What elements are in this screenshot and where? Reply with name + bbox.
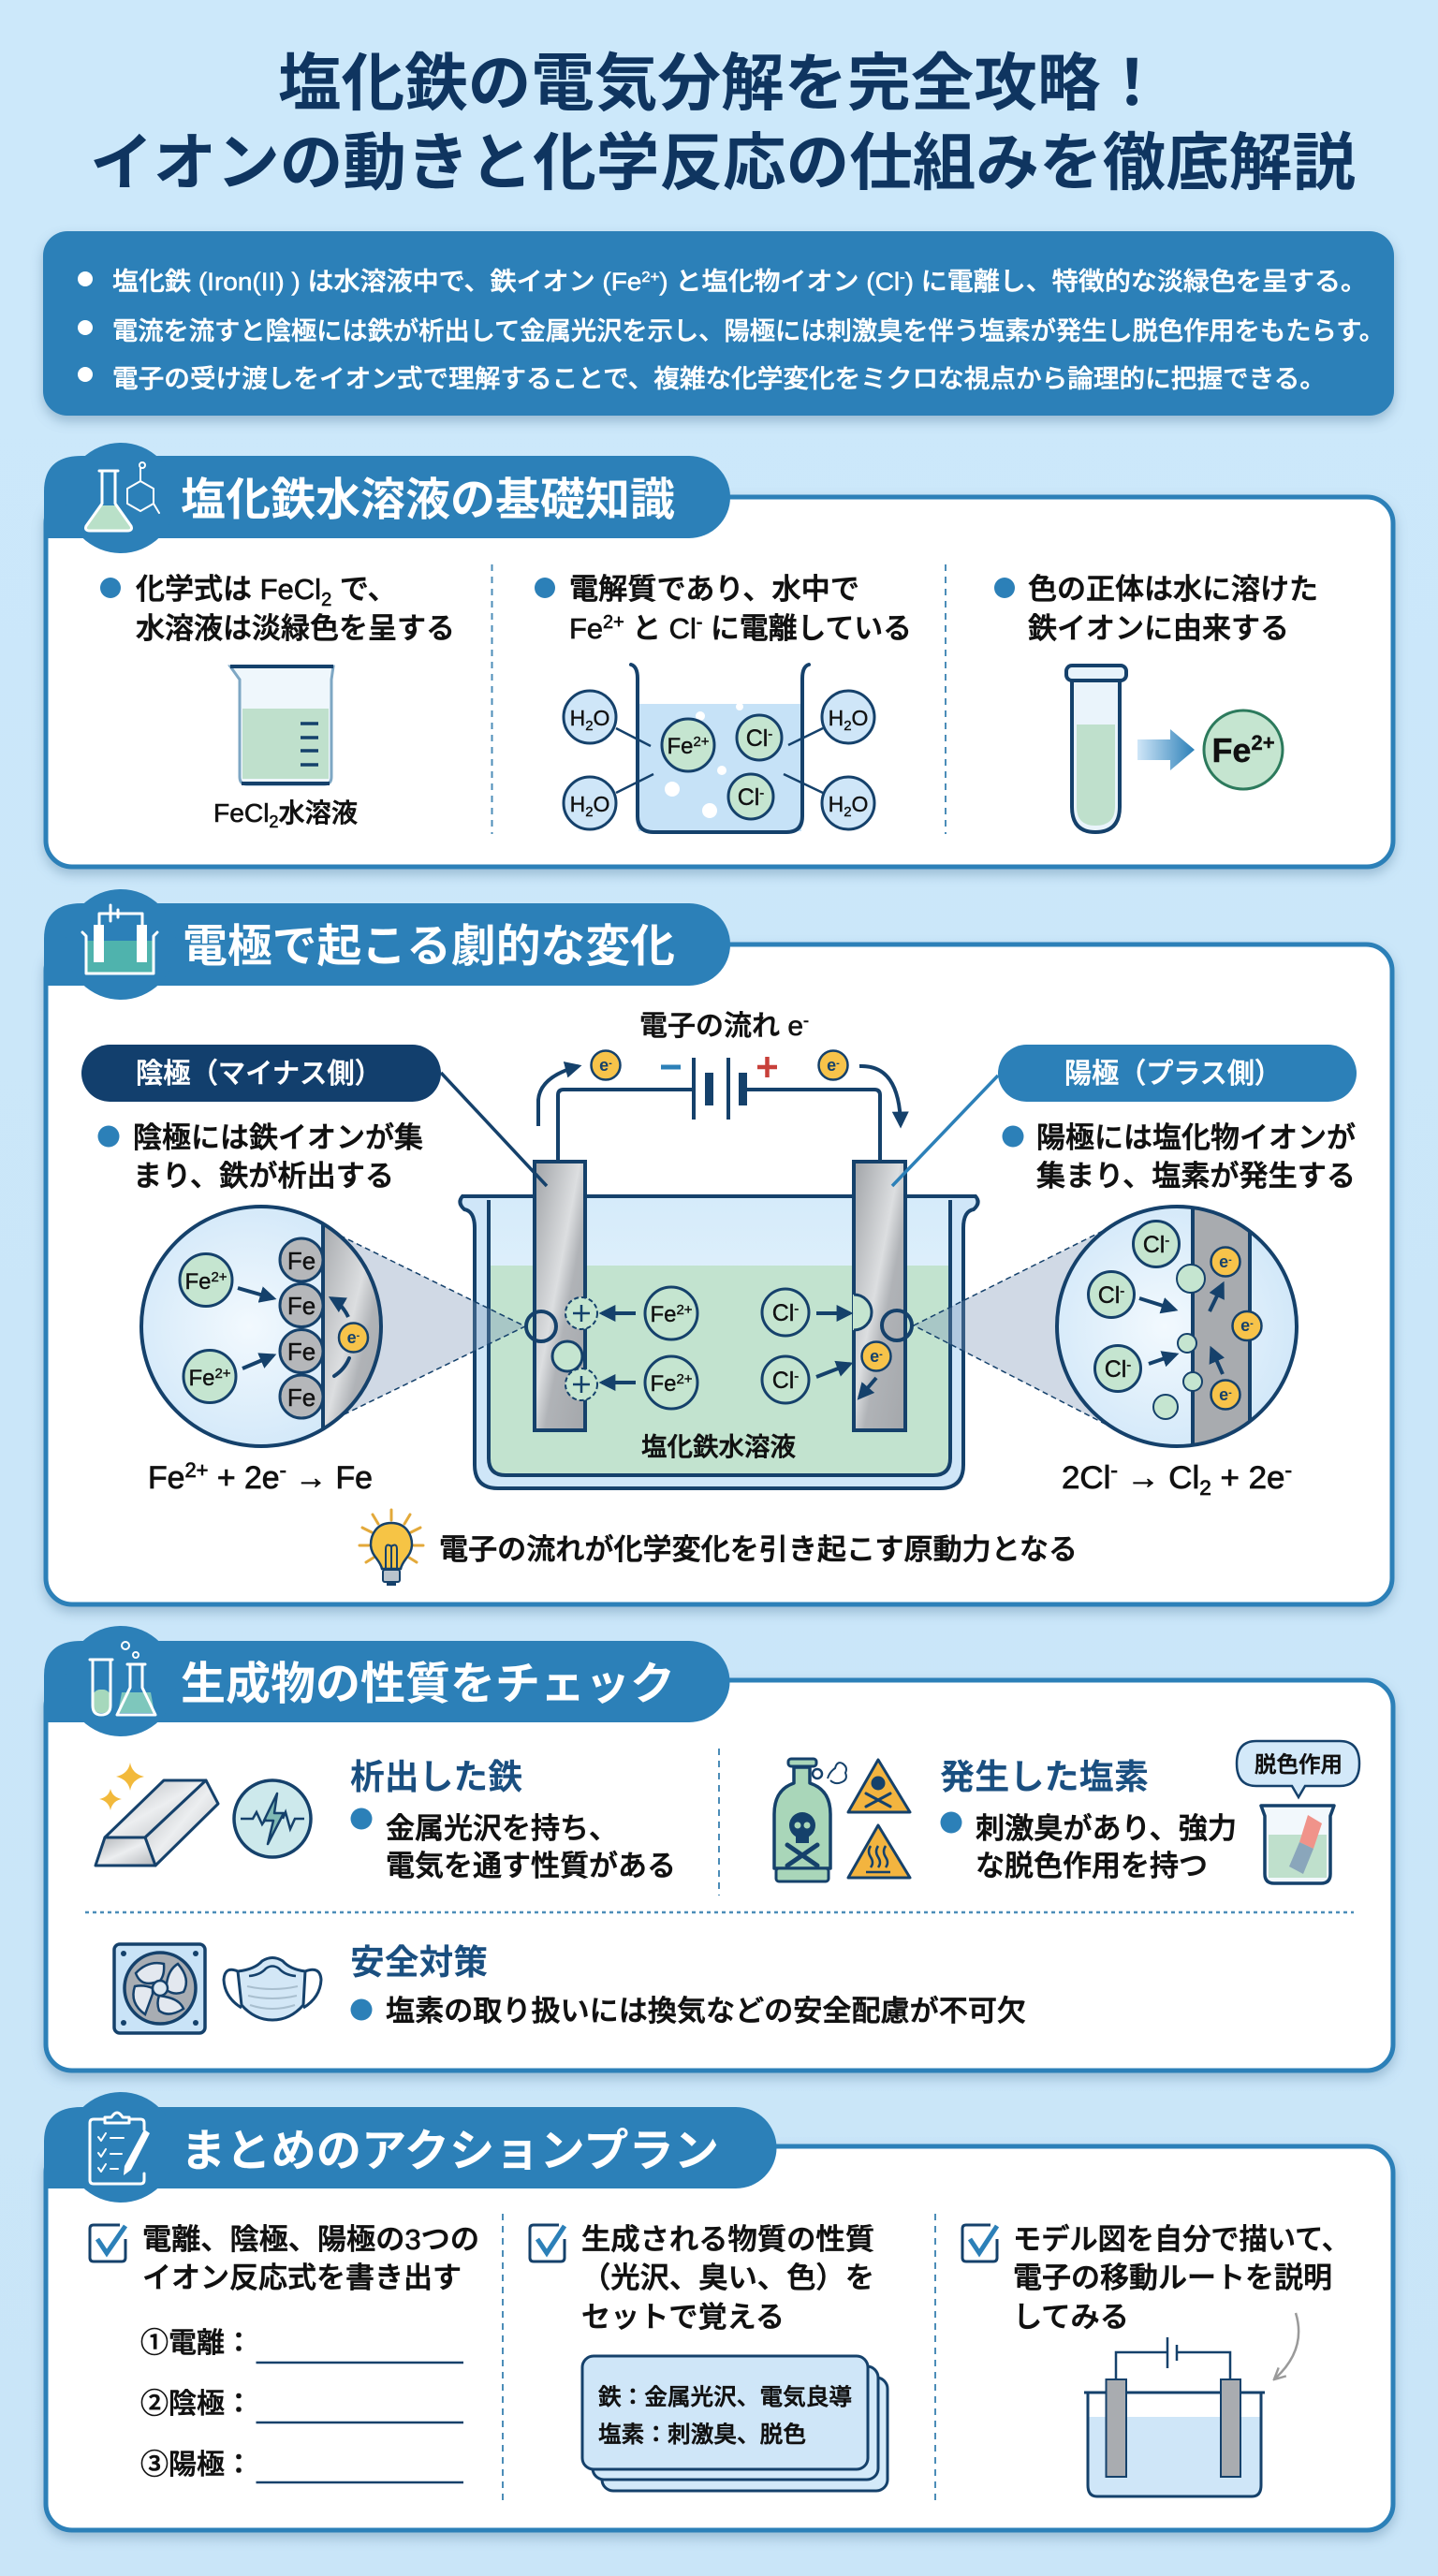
diagram: ions in water: H [829,792,844,816]
column: draw a model: してみる [1013,2301,1129,2334]
column: electrolyte: Fe [569,612,603,645]
anode electrode: - [879,1349,883,1360]
equation: anode: + 2e [1211,1460,1284,1496]
column: electrolyte: 電解質であり、水中で [569,573,859,606]
flash cards: 鉄：金属光沢、電気良導 [598,2384,852,2410]
column: colour origin: 色の正体は水に溶けた [1028,573,1318,606]
intro summary box: ) と塩化物イオン (Cl [659,268,900,296]
diagram: ions in water: - [768,726,772,742]
intro summary box: 電流を流すと陰極には鉄が析出して金属光沢を示し、陽極には刺激臭を伴う塩素が発生し脱色作用をもたらす。 [112,317,1385,345]
column: memorize properties: （光沢、臭い、色）を [581,2261,874,2294]
column: write ion equations: イオン反応式を書き出す [142,2261,462,2294]
column: colour origin [994,573,1318,832]
beaker with electrolyte [460,1196,978,1488]
intro summary box: ) に電離し、特徴的な淡緑色を呈する。 [905,268,1367,296]
beaker with electrolyte: 塩化鉄水溶液 [641,1432,796,1461]
block: generated chlorine: な脱色作用を持つ [976,1850,1208,1882]
column: write ion equations: ①電離： [140,2328,253,2359]
circuit with battery: - [803,1011,809,1030]
magnified view: cathode [141,1198,389,1460]
section header: action plan [44,2092,777,2203]
ion: Fe2+: Fe [1211,731,1251,769]
section header: products: 生成物の性質をチェック [181,1660,675,1709]
circuit with battery [538,1011,901,1162]
magnified view: anode [1057,1198,1297,1460]
magnified view: anode: - [1228,1387,1232,1398]
title [90,49,1356,198]
panel: products [44,1626,1393,2071]
magnified view: cathode: Fe [287,1292,315,1320]
equation: cathode: Fe [148,1460,185,1496]
anode electrode: - [794,1301,799,1317]
icon: iron ingot [95,1763,218,1866]
diagram: ions in water: Cl [746,725,768,752]
diagram: ions in water: 2 [844,804,852,820]
block: generated chlorine: 発生した塩素 [940,1758,1149,1796]
column: chemical formula [100,573,455,831]
icon: bleaching beaker [1261,1806,1334,1883]
intro summary box: 電子の受け渡しをイオン式で理解することで、複雑な化学変化をミクロな視点から論理的に把握できる。 [112,365,1326,393]
anode electrode: Cl [772,1300,794,1326]
intro summary box: 2+ [641,270,659,285]
panel: basics [44,443,1393,867]
magnified view: cathode: Fe [287,1247,315,1275]
column: chemical formula: 2 [321,590,331,610]
magnified view: cathode: 2+ [211,1269,227,1285]
column: chemical formula: 水溶液は淡緑色を呈する [136,612,455,645]
column: draw a model [962,2223,1350,2496]
section header: products [44,1626,730,1736]
equation: anode: 2 [1199,1476,1211,1500]
text: cathode note: まり、鉄が析出する [133,1160,394,1193]
block: generated chlorine: 刺激臭があり、強力 [976,1812,1237,1845]
block: deposited iron: 電気を通す性質がある [386,1850,676,1882]
zoom cones [323,1227,1107,1425]
equation: anode: - [1284,1458,1292,1482]
text: cathode note: 陰極には鉄イオンが集 [133,1121,423,1154]
magnified view: anode: e [1240,1316,1250,1335]
diagram: ions in water: 2 [585,718,594,734]
icon: checkbox [530,2225,565,2261]
magnified view: anode: Cl [1143,1232,1165,1258]
arrow: electron flow right [859,1066,901,1125]
column: chemical formula: FeCl [213,798,269,827]
magnified view: anode: e [1219,1385,1228,1404]
text: anode note: 集まり、塩素が発生する [1036,1160,1356,1193]
model diagram [1084,2337,1265,2496]
circuit with battery: 電子の流れ e [639,1011,803,1042]
diagram: ions in water: H [570,792,585,816]
magnified view: cathode: Fe [287,1338,315,1366]
callout: bleaching: 脱色作用 [1255,1752,1343,1777]
equation: anode: - [1110,1458,1118,1482]
icon: beaker of FeCl2 [230,666,333,784]
icon: hot warning [848,1825,910,1878]
ion: Fe2+ [1204,710,1283,789]
magnified view: cathode: e [347,1328,357,1347]
icon: checkbox [90,2225,125,2261]
diagram: ions in water: H [829,706,844,730]
ion: Fe2+: 2+ [1251,731,1275,754]
takeaway with bulb: 電子の流れが化学変化を引き起こす原動力となる [439,1533,1078,1566]
icon: checkbox [962,2225,997,2261]
cathode electrode: 2+ [676,1371,693,1387]
circuit with battery: - [609,1058,612,1069]
icon: test tube [1066,666,1126,832]
magnified view: cathode: Fe [188,1366,214,1391]
arrow: gray curved [1275,2313,1299,2378]
panel: electrodes [44,889,1392,1604]
column: electrolyte: に電離している [702,612,912,645]
anode electrode: e [870,1347,879,1366]
cathode electrode [526,1162,697,1430]
magnified view: cathode: Fe [184,1269,211,1295]
title: 塩化鉄の電気分解を完全攻略！ [278,49,1164,119]
diagram: ions in water [564,665,874,832]
icon: chlorine cylinder [774,1759,846,1881]
section header: basics: 塩化鉄水溶液の基礎知識 [181,476,675,525]
diagram: ions in water: O [852,792,868,816]
icon: light bulb [360,1510,423,1586]
leader lines [441,1073,998,1186]
column: draw a model: モデル図を自分で描いて、 [1013,2223,1350,2256]
icon: poison warning [848,1760,910,1812]
title: イオンの動きと化学反応の仕組みを徹底解説 [90,128,1356,198]
text: anode note: 陽極には塩化物イオンが [1036,1121,1356,1154]
anode electrode: - [794,1368,799,1384]
cathode electrode: 2+ [676,1302,693,1318]
column: chemical formula: 2 [269,812,279,831]
block: deposited iron: 析出した鉄 [350,1758,522,1796]
column: electrolyte: 2+ [603,612,624,633]
diagram: ions in water: O [594,706,609,730]
column: memorize properties [530,2223,888,2491]
section header: basics [44,443,730,553]
column: write ion equations [90,2223,479,2482]
circuit with battery: e [827,1056,836,1075]
section header: action plan: まとめのアクションプラン [181,2127,719,2176]
column: memorize properties: セットで覚える [581,2301,785,2334]
diagram: ions in water: O [852,706,868,730]
column: memorize properties: 生成される物質の性質 [581,2223,874,2256]
diagram: ions in water: 2 [844,718,852,734]
diagram: ions in water: - [759,785,764,801]
cathode electrode: Fe [650,1371,676,1397]
column: colour origin: 鉄イオンに由来する [1028,612,1289,645]
text: anode note [1002,1121,1356,1193]
block: safety [350,1943,1026,2027]
column: draw a model: 電子の移動ルートを説明 [1013,2261,1332,2294]
magnified view: anode: - [1120,1283,1124,1299]
diagram: ions in water: Fe [667,734,693,759]
circuit with battery: e [599,1056,609,1075]
intro summary box [43,231,1394,416]
diagram: ions in water: O [594,792,609,816]
label: anode [998,1045,1357,1102]
magnified view: anode: Cl [1105,1356,1126,1383]
equation: cathode: - [280,1458,286,1482]
callout: bleaching [1237,1741,1359,1797]
diagram: ions in water: 2 [585,804,594,820]
diagram: ions in water: 2+ [693,734,710,750]
label: cathode: 陰極（マイナス側） [136,1059,382,1090]
intro summary box: 塩化鉄 (Iron(II) ) は水溶液中で、鉄イオン (Fe [112,268,623,296]
magnified view: anode: - [1250,1318,1254,1329]
equation: cathode: → Fe [286,1460,373,1496]
column: electrolyte: - [697,612,702,633]
label: anode: 陽極（プラス側） [1064,1059,1282,1090]
magnified view: anode: Cl [1098,1282,1120,1309]
cathode electrode: Fe [650,1302,676,1327]
column: write ion equations: ③陽極： [140,2450,253,2481]
circuit with battery: - [836,1058,840,1069]
column: write ion equations: ②陰極： [140,2389,253,2420]
magnified view: cathode: Fe [287,1383,315,1412]
text: cathode note [97,1121,423,1193]
icon: conductivity [234,1780,311,1857]
block: deposited iron: 金属光沢を持ち、 [386,1812,618,1845]
icon: ventilation fan [114,1944,205,2033]
magnified view: anode: - [1126,1357,1131,1373]
arrow: tube to ion [1137,729,1195,770]
column: electrolyte [535,573,912,832]
equation: cathode: + 2e [208,1460,280,1496]
panel: action plan [44,2092,1393,2530]
block: safety: 安全対策 [350,1943,488,1982]
diagram: ions in water: H [570,706,585,730]
magnified view: anode: e [1219,1252,1228,1271]
column: chemical formula: 化学式は FeCl [136,573,321,606]
anode electrode [762,1162,912,1430]
magnified view: cathode: 2+ [214,1366,231,1382]
magnified view: cathode: - [357,1330,360,1341]
diagram: ions in water: Cl [738,784,759,811]
flash cards [582,2356,888,2491]
equation: cathode: 2+ [184,1458,208,1482]
intro summary box: - [900,270,905,285]
section header: electrodes: 電極で起こる劇的な変化 [183,922,675,972]
column: chemical formula: 水溶液 [279,798,358,827]
column: electrolyte: と Cl [624,612,697,645]
column: chemical formula: で、 [331,573,397,606]
block: deposited iron [350,1758,676,1882]
block: generated chlorine [940,1758,1237,1882]
magnified view: anode: - [1228,1254,1232,1266]
magnified view: anode: - [1165,1233,1169,1249]
icon: face mask [224,1958,321,2020]
anode electrode: Cl [772,1368,794,1394]
flash cards: 塩素：刺激臭、脱色 [598,2422,806,2448]
arrow: electron flow left [538,1066,579,1126]
column: write ion equations: 電離、陰極、陽極の3つの [142,2223,479,2256]
takeaway with bulb [360,1510,1078,1586]
section header: electrodes [44,889,730,1000]
equation: anode: 2Cl [1062,1460,1109,1496]
label: cathode [81,1045,441,1102]
block: safety: 塩素の取り扱いには換気などの安全配慮が不可欠 [386,1995,1026,2027]
equation: anode: → Cl [1118,1460,1199,1496]
